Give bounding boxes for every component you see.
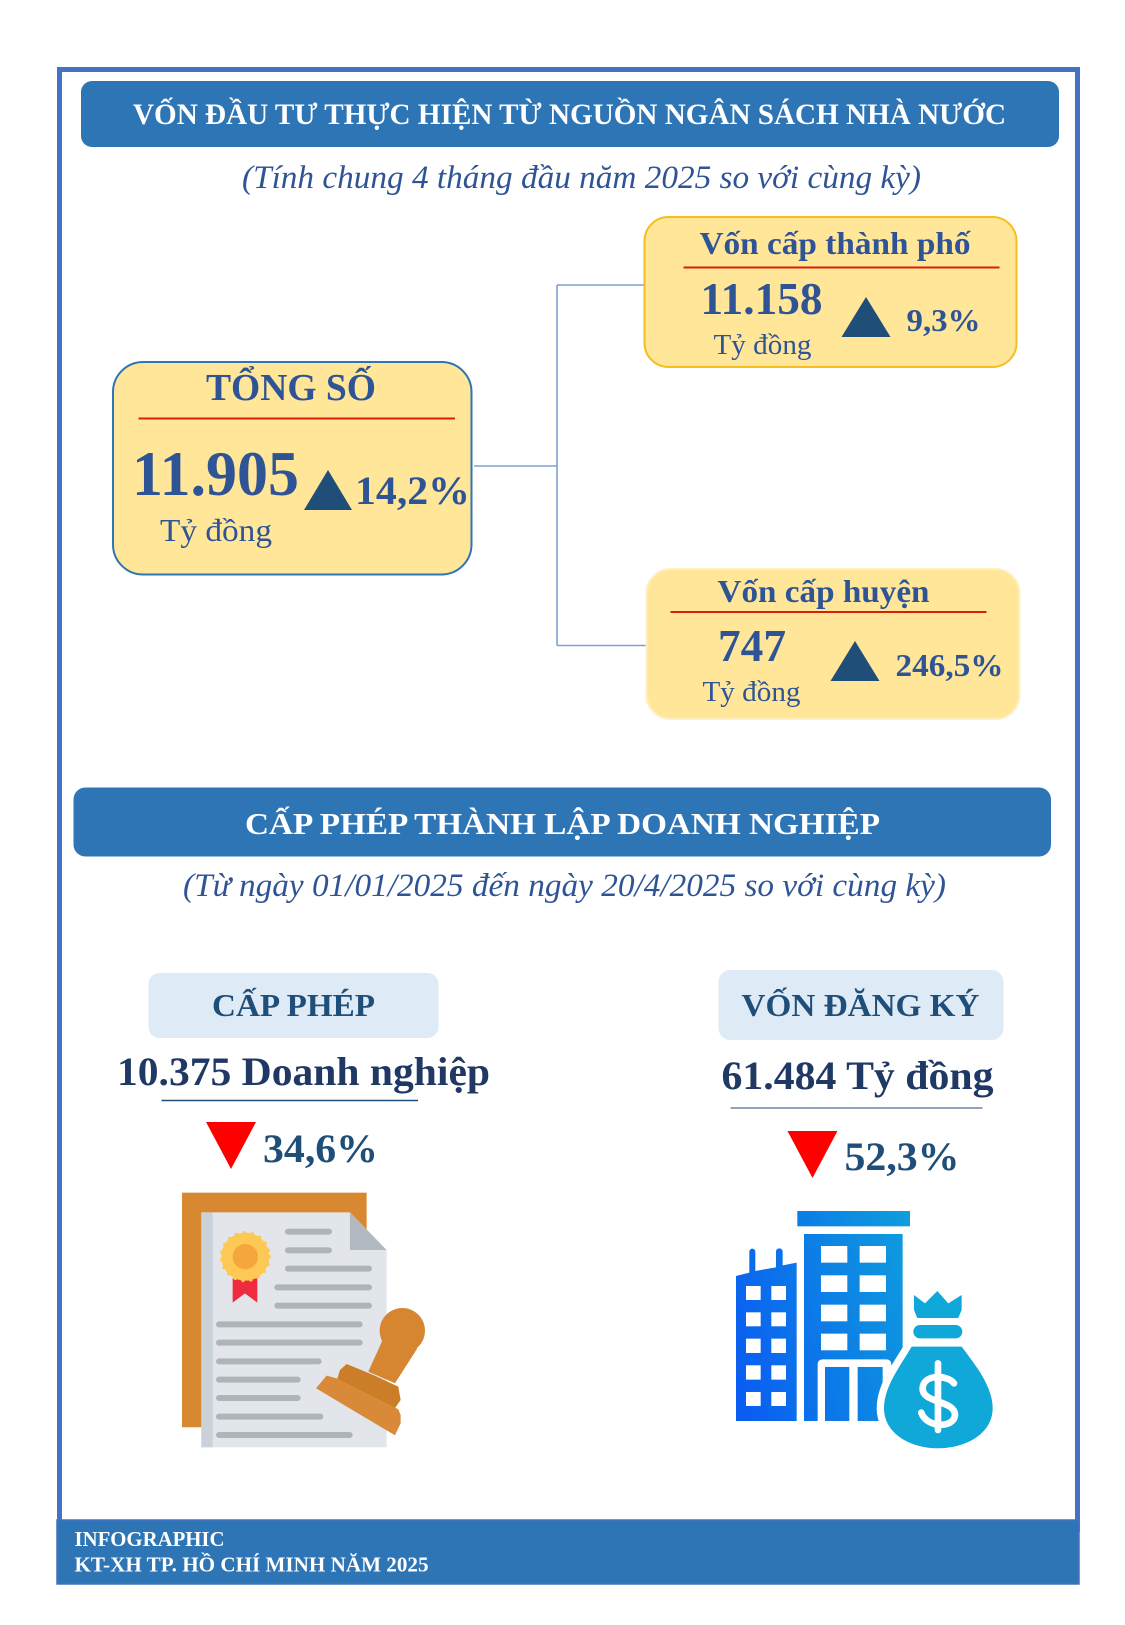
icon: down triangle	[788, 1131, 838, 1178]
total value: 11.905	[132, 439, 299, 509]
panel: licences	[117, 973, 490, 1171]
district heading: Vốn cấp huyện	[718, 573, 930, 609]
footer line one: INFOGRAPHIC	[74, 1527, 224, 1551]
connector lines	[474, 285, 646, 646]
licences value: 10.375 Doanh nghiệp	[117, 1049, 490, 1094]
footer band	[57, 1520, 1079, 1584]
panel: district-level capital	[646, 569, 1020, 719]
heading: state budget investment	[81, 81, 1059, 147]
heading: business registration: CẤP PHÉP THÀNH LẬP DOANH NGHIỆP	[245, 805, 880, 841]
district unit: Tỷ đồng	[702, 676, 800, 708]
total unit: Tỷ đồng	[160, 512, 272, 548]
district change: 246,5%	[896, 647, 1004, 683]
heading: business registration	[74, 788, 1051, 856]
city unit: Tỷ đồng	[714, 329, 812, 361]
capital label: VỐN ĐĂNG KÝ	[742, 987, 980, 1023]
icon: office buildings and money bag	[736, 1211, 993, 1448]
capital value: 61.484 Tỷ đồng	[722, 1053, 994, 1098]
city change: 9,3%	[906, 302, 980, 338]
capital label	[718, 970, 1004, 1040]
district value: 747	[718, 621, 786, 671]
icon: up triangle	[830, 641, 880, 681]
icon: up triangle	[304, 470, 352, 510]
panel: registered capital	[718, 970, 1004, 1179]
panel: total	[113, 362, 472, 574]
icon: certificate and stamp	[182, 1193, 425, 1447]
heading: state budget investment: VỐN ĐẦU TƯ THỰC HIỆN TỪ NGUỒN NGÂN SÁCH NHÀ NƯỚC	[133, 97, 1006, 131]
city heading: Vốn cấp thành phố	[700, 225, 972, 261]
capital change: 52,3%	[844, 1134, 960, 1179]
licences label: CẤP PHÉP	[212, 987, 375, 1023]
licences label	[148, 973, 438, 1038]
footer line two: KT-XH TP. HỒ CHÍ MINH NĂM 2025	[74, 1552, 428, 1576]
total heading: TỔNG SỐ	[206, 365, 376, 409]
icon: up triangle	[842, 297, 890, 337]
subtitle: period two: (Từ ngày 01/01/2025 đến ngày 20/4/2025 so với cùng kỳ)	[183, 868, 946, 904]
licences change: 34,6%	[263, 1126, 378, 1171]
total change: 14,2%	[355, 468, 470, 513]
subtitle: period one: (Tính chung 4 tháng đầu năm 2025 so với cùng kỳ)	[242, 160, 921, 196]
panel: city-level capital	[644, 217, 1016, 367]
icon: down triangle	[206, 1122, 256, 1169]
city value: 11.158	[700, 274, 822, 324]
